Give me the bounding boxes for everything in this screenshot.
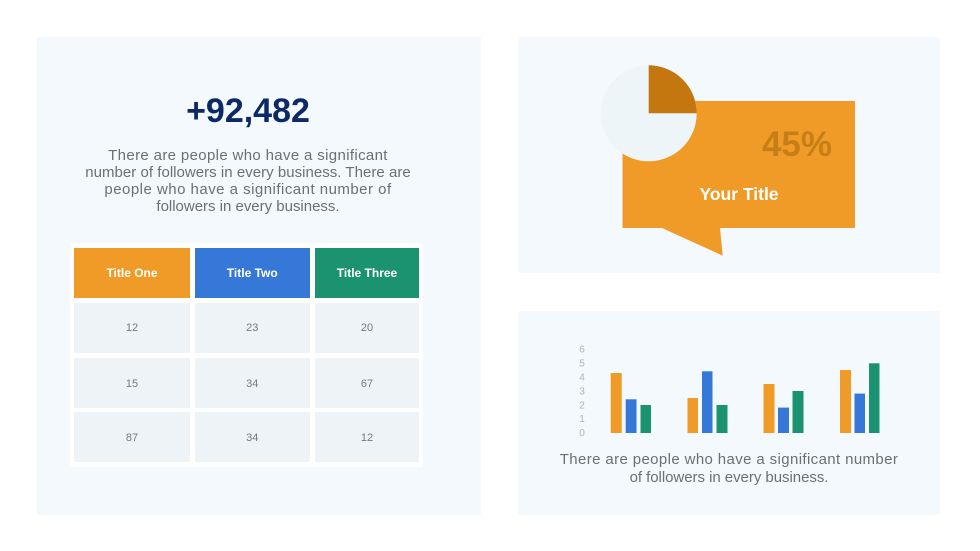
text block: description: There are people who have a significant — [108, 147, 388, 164]
panel: top right callout — [518, 37, 940, 273]
panel: left summary — [37, 37, 481, 515]
cell 12: 12 — [361, 432, 373, 444]
title: Your Title: Your Title — [699, 184, 779, 204]
text block: chart description: There are people who have a significant number — [560, 451, 898, 468]
table — [70, 243, 423, 467]
text block: description: people who have a significant number of — [104, 181, 392, 198]
cell 87: 87 — [126, 432, 138, 444]
speech bubble — [622, 101, 855, 256]
header: Title Three — [315, 248, 419, 298]
cell 15: 15 — [126, 378, 138, 390]
axis labels: 3 — [579, 386, 585, 398]
text block: chart description — [560, 451, 898, 486]
header: Title Three: Title Three — [337, 266, 397, 280]
text block: chart description: of followers in every business. — [630, 469, 828, 486]
cell 12 — [315, 412, 419, 462]
cell 15 — [74, 358, 190, 408]
panel: bottom right chart — [518, 311, 940, 515]
cell 23: 23 — [246, 322, 258, 334]
cell 87 — [74, 412, 190, 462]
cell 67 — [315, 358, 419, 408]
axis labels: 1 — [579, 414, 585, 425]
cell 67: 67 — [361, 378, 373, 390]
cell 23 — [194, 303, 310, 353]
text block: description: followers in every business. — [156, 198, 340, 215]
cell 34: 34 — [246, 432, 258, 444]
cell 34 — [194, 412, 310, 462]
group 1 bars — [611, 373, 651, 433]
cell 12 — [74, 303, 190, 353]
text block: description — [85, 147, 411, 215]
cell 12: 12 — [126, 322, 138, 334]
heading: +92,482: +92,482 — [186, 92, 310, 130]
cell 34: 34 — [246, 378, 258, 390]
cell 20 — [315, 303, 419, 353]
header: Title Two: Title Two — [227, 266, 278, 280]
text block: description: number of followers in every business. There are — [85, 164, 411, 181]
group 4 bars — [840, 363, 880, 433]
axis labels: 6 — [579, 344, 585, 356]
header: Title One — [74, 248, 190, 298]
pie chart — [601, 65, 697, 161]
axis labels: 2 — [579, 400, 585, 412]
group 3 bars — [764, 384, 804, 433]
axis labels: 5 — [579, 358, 585, 370]
cell 20: 20 — [361, 322, 373, 334]
bar chart — [579, 344, 880, 439]
axis labels — [579, 344, 585, 439]
value: 45%: 45% — [762, 125, 832, 164]
axis labels: 4 — [579, 372, 585, 384]
axis labels: 0 — [579, 428, 585, 439]
cell 34 — [194, 358, 310, 408]
header: Title One: Title One — [106, 266, 158, 280]
group 2 bars — [688, 371, 728, 433]
header: Title Two — [194, 248, 310, 298]
